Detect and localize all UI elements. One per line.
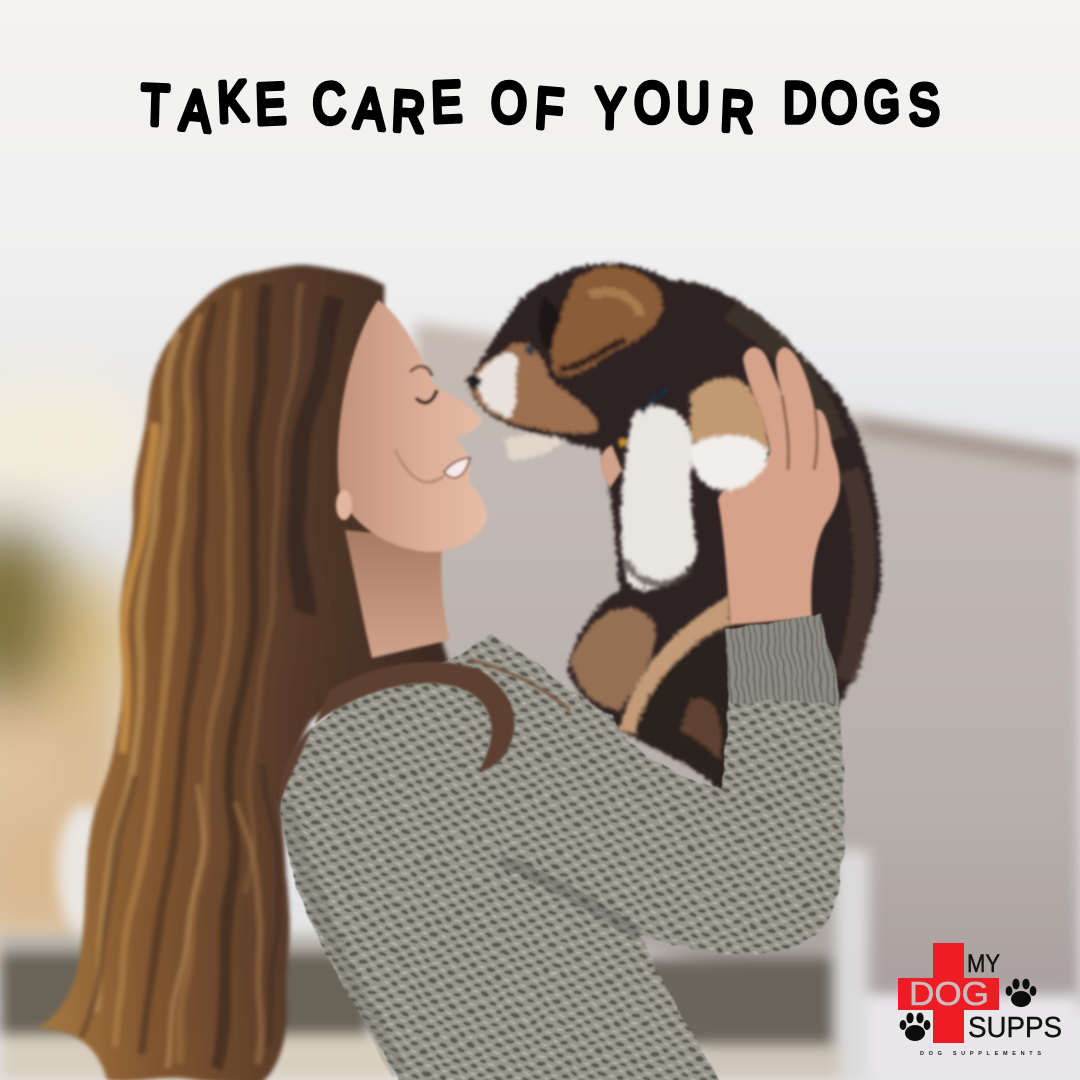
- logo: wordmark: DOG: [909, 975, 989, 1012]
- background: bench and ground: [0, 805, 1080, 1080]
- puppy: white paw: [691, 435, 768, 490]
- title: OF: [491, 70, 565, 142]
- title: [140, 68, 940, 144]
- title: DOGS: [783, 69, 940, 137]
- icon: paw right: [1006, 979, 1036, 1007]
- title: CARE: [311, 69, 463, 144]
- puppy: hind leg: [570, 608, 656, 710]
- woman: hair back: [30, 268, 450, 1080]
- logo: wordmark: [909, 950, 1062, 1057]
- puppy: brown ear and head: [552, 267, 663, 377]
- background: concrete wall: [415, 322, 1080, 1010]
- title: TAKE: [140, 68, 287, 144]
- logo: red cross: [898, 943, 999, 1043]
- background: warm blurred garden on left: [0, 370, 170, 950]
- woman: forearm and hand: [601, 347, 840, 625]
- puppy: tan markings: [690, 377, 769, 460]
- logo: wordmark: MY: [967, 950, 1000, 978]
- puppy: chest, paw and legs: [570, 377, 769, 790]
- logo: wordmark: DOG SUPPLEMENTS: [920, 1051, 1041, 1057]
- icon: paw left: [900, 1013, 930, 1041]
- face details: [416, 390, 437, 403]
- puppy: white chest: [621, 405, 698, 590]
- title: YOUR: [594, 70, 755, 144]
- puppy: dark fur body: [467, 263, 881, 790]
- woman: front hair strands over sweater: [280, 660, 570, 800]
- logo: wordmark: SUPPS: [968, 1012, 1062, 1044]
- woman: sweater: [282, 614, 844, 1080]
- woman: neck and face: [336, 300, 487, 658]
- logo: My Dog Supps: [898, 943, 1062, 1057]
